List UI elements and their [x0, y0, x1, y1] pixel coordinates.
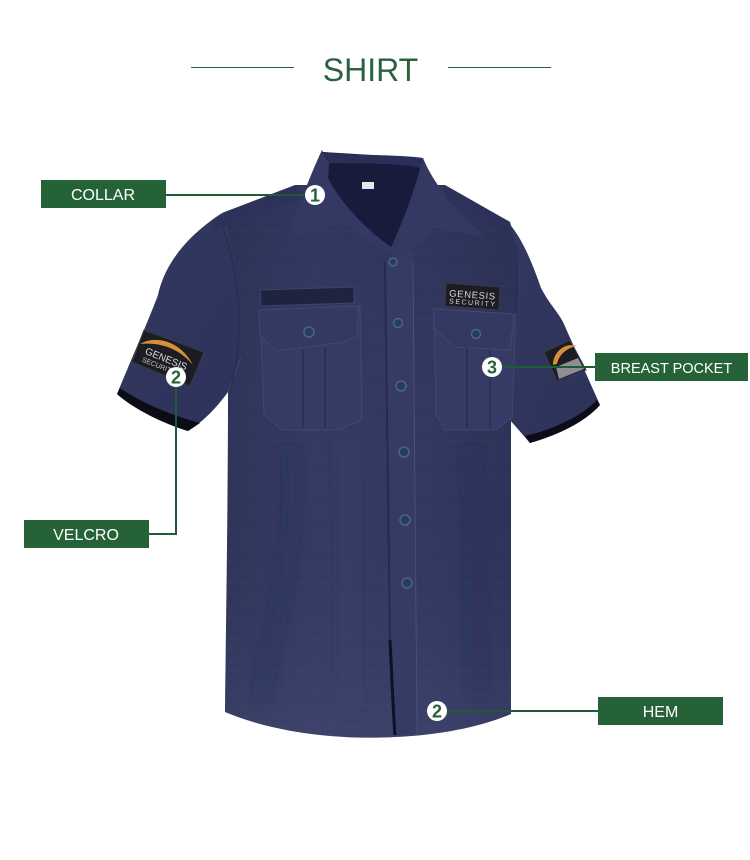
callout: hem: 2	[432, 702, 442, 722]
collar left	[288, 150, 392, 256]
callout: collar: COLLAR	[71, 187, 135, 204]
left breast pocket	[259, 306, 362, 430]
callout: collar: 1	[310, 186, 320, 206]
fabric texture	[222, 185, 517, 738]
shirt body	[222, 185, 517, 738]
shoulder strap right	[445, 187, 510, 226]
buttons	[389, 258, 412, 588]
callout: breast pocket: 3	[487, 358, 497, 378]
left sleeve badge: SECURITY	[141, 357, 177, 377]
callout: hem: HEM	[643, 704, 678, 721]
shirt interior	[320, 152, 430, 250]
right sleeve badge	[544, 340, 586, 381]
callout: velcro: 2	[171, 368, 181, 388]
placket	[385, 250, 417, 736]
velcro strip	[260, 287, 354, 306]
title: SHIRT	[323, 52, 418, 88]
callout: velcro: VELCRO	[53, 527, 119, 544]
left sleeve	[117, 213, 250, 431]
left sleeve badge	[132, 330, 204, 386]
hem shading	[222, 185, 517, 738]
inner collar band	[324, 152, 423, 168]
right sleeve	[505, 222, 600, 443]
shoulder strap left	[212, 186, 302, 233]
callout: velcro	[24, 367, 186, 548]
collar right	[390, 158, 485, 262]
callout: breast pocket	[482, 353, 748, 381]
shirt illustration	[117, 150, 600, 738]
callout: breast pocket: BREAST POCKET	[611, 361, 732, 377]
size label	[362, 182, 374, 189]
chest badge: GENESIS	[449, 288, 496, 303]
sleeve seams	[222, 226, 517, 418]
callout: hem	[427, 697, 723, 725]
right breast pocket	[434, 309, 516, 430]
chest badge	[445, 283, 500, 310]
left sleeve badge: GENESIS	[143, 346, 189, 373]
fabric folds	[262, 440, 480, 705]
chest badge: SECURITY	[449, 298, 496, 309]
callout: collar	[41, 180, 325, 208]
